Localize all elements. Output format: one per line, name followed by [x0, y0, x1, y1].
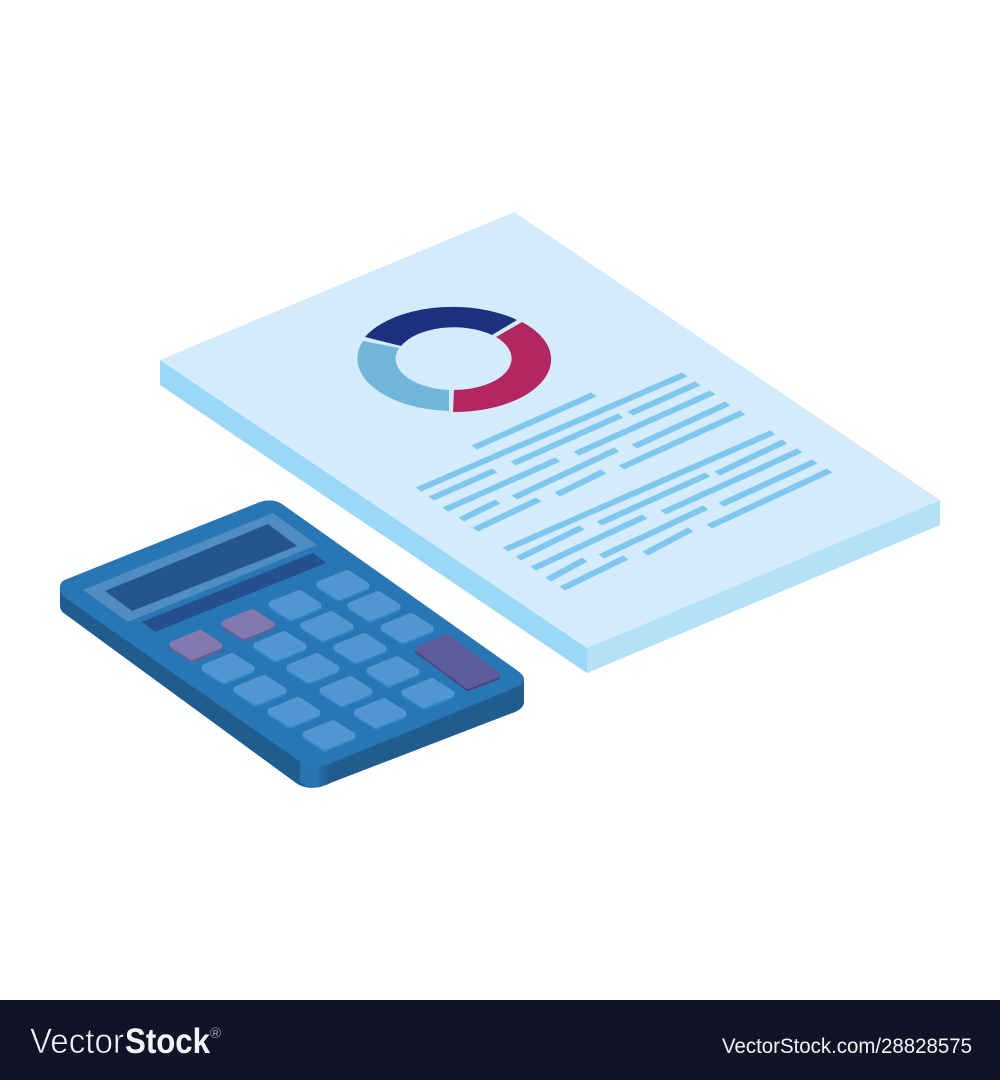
paper left edge: [160, 360, 587, 673]
paper right edge: [587, 500, 940, 673]
calculator bottom corner: [300, 762, 329, 787]
footer logo: [30, 1022, 210, 1061]
calculator body side: [60, 587, 524, 788]
screen display: [105, 524, 297, 611]
purple function keys: [173, 612, 271, 658]
footer url: VectorStock.com/28828575: [722, 1035, 972, 1058]
donut segment: crimson: [453, 322, 551, 412]
blue number keys: [205, 574, 451, 748]
text lines: upper block: [416, 372, 746, 532]
footer bar: [0, 1000, 1000, 1080]
dark bar below screen: [142, 553, 326, 632]
large purple key: [418, 637, 497, 688]
document sheet: [160, 212, 940, 673]
paper top face: [160, 212, 940, 648]
donut chart: [357, 307, 551, 412]
text lines: lower block: [502, 430, 832, 590]
screen frame: [83, 513, 317, 622]
footer logo: Vector: [30, 1022, 124, 1061]
donut segment: navy: [365, 307, 517, 346]
calculator top face: [60, 500, 524, 767]
donut segment: light blue: [357, 341, 449, 411]
calculator: [60, 500, 524, 788]
registered mark: ®: [210, 1025, 221, 1042]
footer logo: Stock: [125, 1022, 210, 1061]
